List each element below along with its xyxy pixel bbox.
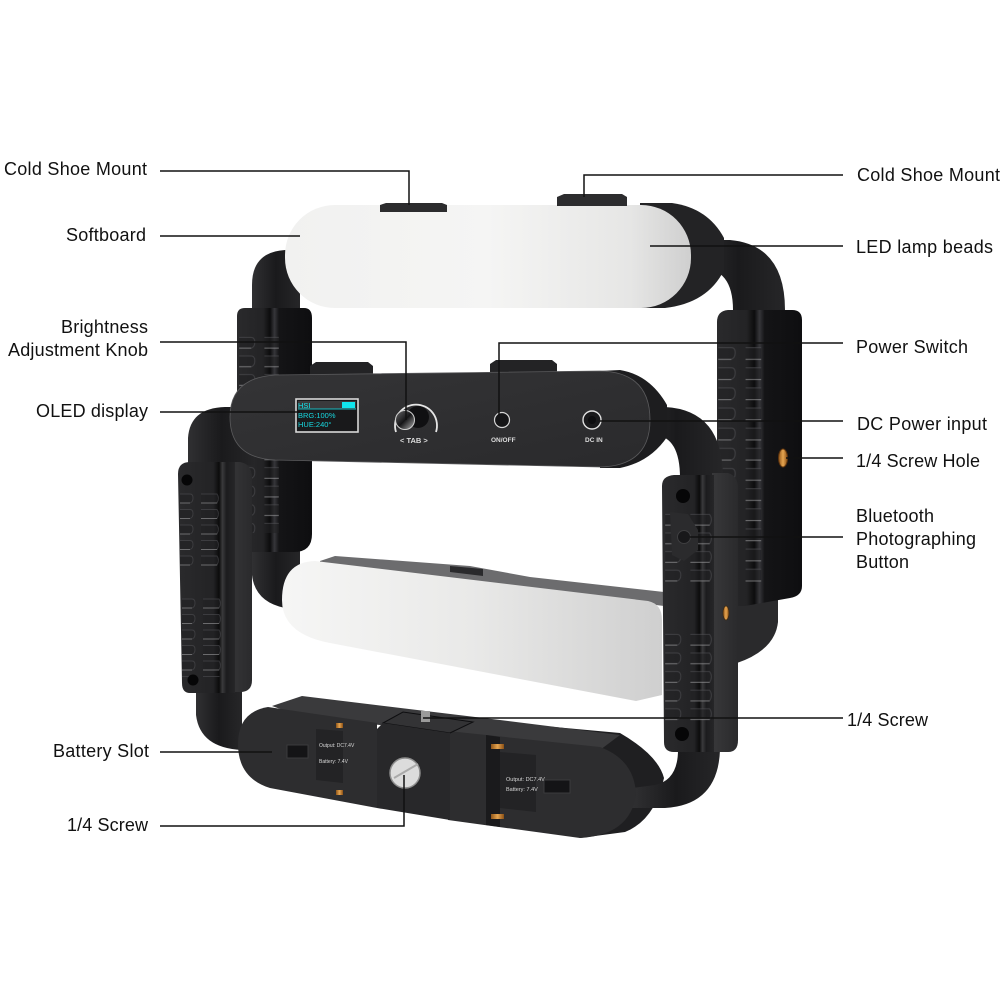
OLED display: HUE:240°: [298, 420, 331, 429]
back left grip: [237, 308, 312, 552]
cold shoe panel right: [490, 360, 557, 376]
left labels: [4, 159, 149, 835]
right labels: DC Power input: [857, 414, 987, 434]
front tube left: [188, 407, 255, 465]
battery rear body: [500, 722, 664, 838]
right contacts: [491, 744, 504, 819]
panel face: [230, 371, 650, 467]
bluetooth button: [670, 512, 698, 561]
screw stud: [421, 711, 430, 722]
left contacts: [336, 723, 343, 795]
left latch: [287, 745, 308, 758]
lower softboard: [282, 556, 664, 701]
right labels: Bluetooth: [856, 506, 934, 526]
right battery label: Output: DC7.4V: [506, 777, 545, 783]
battery housing top: [272, 696, 620, 750]
front tube right: [630, 407, 723, 478]
right battery label: Battery: 7.4V: [506, 787, 538, 793]
cold shoe panel left: [310, 362, 373, 376]
left labels: Battery Slot: [53, 741, 149, 761]
right labels: 1/4 Screw: [847, 710, 929, 730]
cold shoe top left: [380, 203, 447, 212]
back frame tubes: [252, 240, 785, 608]
right labels: Power Switch: [856, 337, 968, 357]
right labels: [847, 165, 1000, 730]
front right grip: [662, 473, 738, 752]
back right grip: [717, 310, 802, 663]
left labels: OLED display: [36, 401, 148, 421]
left battery label: [316, 729, 355, 783]
DC input: DC IN: [585, 437, 603, 444]
OLED display: HSI: [298, 401, 311, 410]
right labels: Button: [856, 552, 909, 572]
mounting knob: [390, 758, 420, 788]
panel housing: [600, 370, 667, 468]
battery base: [238, 696, 636, 838]
right battery plate: [448, 731, 636, 838]
OLED display: BRG:100%: [298, 411, 336, 420]
left battery label: Output: DC7.4V: [319, 743, 355, 749]
center block: [377, 712, 473, 820]
left battery label: Battery: 7.4V: [319, 759, 349, 765]
lower frame tubes: [196, 690, 720, 808]
right battery label: [500, 752, 545, 812]
1/4 screw hole: [778, 449, 788, 467]
left battery plate: [238, 707, 377, 808]
front control panel: [188, 360, 723, 478]
OLED display: [296, 399, 358, 432]
on/off switch: ON/OFF: [491, 437, 516, 444]
back softboard dark housing: [640, 203, 724, 308]
front left grip: [178, 462, 252, 693]
right labels: LED lamp beads: [856, 237, 993, 257]
cold shoe top right: [557, 194, 627, 206]
on/off switch: [491, 412, 516, 444]
softboard top: [285, 205, 691, 308]
right labels: Photographing: [856, 529, 976, 549]
left labels: Cold Shoe Mount: [4, 159, 147, 179]
callout lines: [160, 171, 843, 826]
right labels: Cold Shoe Mount: [857, 165, 1000, 185]
left labels: Adjustment Knob: [8, 340, 148, 360]
DC input: [583, 411, 603, 444]
left labels: Brightness: [61, 317, 148, 337]
brightness knob: [395, 405, 437, 445]
back light unit: [237, 194, 802, 663]
left labels: Softboard: [66, 225, 146, 245]
right latch: [544, 780, 570, 793]
left labels: 1/4 Screw: [67, 815, 149, 835]
right labels: 1/4 Screw Hole: [856, 451, 980, 471]
brightness knob: < TAB >: [400, 436, 428, 445]
